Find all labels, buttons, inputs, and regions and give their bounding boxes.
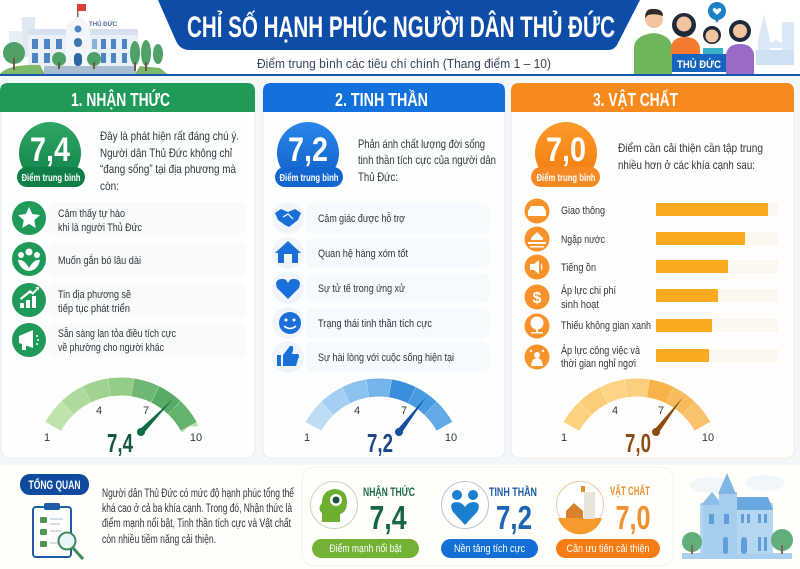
- panel: overview strip: [0, 465, 800, 569]
- row: support: [272, 202, 490, 234]
- gauge: 7,0: 7: [658, 405, 664, 417]
- subtitle: Điểm trung bình các tiêu chí chính (Thang điểm 1 – 10): [257, 56, 551, 71]
- row: traffic: Giao thông: [561, 205, 605, 217]
- overview text: điểm mạnh nổi bật, Tinh thần tích cực và Vật chất: [102, 518, 292, 530]
- title: CHỈ SỐ HẠNH PHÚC NGƯỜI DÂN THỦ ĐỨC: [187, 10, 615, 44]
- illustration: Thu Duc administrative building: [0, 4, 167, 74]
- row: lack of green space: [524, 314, 778, 338]
- row: neighbours: Quan hệ hàng xóm tốt: [318, 248, 408, 260]
- row: positive mood: [272, 307, 490, 339]
- overview tag: TỔNG QUAN: [28, 479, 80, 492]
- row: living cost: [524, 284, 778, 311]
- summary: Tinh thần: [441, 482, 538, 558]
- summary: Vật chất: VẬT CHẤT: [610, 483, 650, 498]
- gauge: 7,4: 10: [190, 432, 202, 444]
- gauge: 7,0: 7,0: [625, 428, 651, 458]
- illustration: family with Thu Duc sign: THỦ ĐỨC: [677, 58, 721, 71]
- icon: clipboard with magnifier: [33, 503, 83, 559]
- row: living cost: sinh hoạt: [561, 299, 599, 311]
- summary: Nhận thức: [310, 482, 419, 558]
- intro text: Điểm cần cải thiện cần tập trung: [618, 141, 763, 155]
- row: support: Cảm giác được hỗ trợ: [318, 212, 405, 225]
- gauge: 7,0: [561, 387, 714, 458]
- panel heading bar: 3. VẬT CHẤT: [593, 89, 678, 110]
- row: development: [12, 283, 246, 317]
- gauge: 7,4: [44, 386, 202, 458]
- gauge: 7,2: 7: [401, 405, 407, 417]
- row: traffic: [524, 198, 778, 224]
- row: neighbours: [272, 237, 490, 269]
- illustration: church: [682, 473, 793, 559]
- panel heading bar: 1. NHẬN THỨC: [71, 89, 170, 110]
- overview text: khá cao ở cả ba khía cạnh. Trong đó, Nhận thức là: [102, 503, 292, 515]
- row: proud: khi là người Thủ Đức: [58, 222, 142, 234]
- row: work pressure: thời gian nghỉ ngơi: [561, 358, 636, 370]
- row: flooding: [524, 226, 778, 252]
- row: development: tiếp tục phát triển: [58, 303, 130, 315]
- summary box outline: [302, 467, 673, 566]
- overview text: Người dân Thủ Đức có mức độ hạnh phúc tổng thể: [102, 488, 294, 500]
- row: kindness: Sự tử tế trong ứng xử: [318, 283, 406, 295]
- gauge: 7,0: 1: [561, 432, 567, 444]
- gauge: 7,4: 1: [44, 432, 50, 444]
- intro text: [618, 141, 763, 172]
- intro text: Thủ Đức:: [358, 170, 398, 184]
- title banner: [158, 0, 640, 50]
- summary: Nhận thức: Điểm mạnh nổi bật: [330, 543, 402, 555]
- overview text: còn nhiều tiềm năng cải thiện.: [102, 534, 216, 546]
- row: flooding: Ngập nước: [561, 234, 605, 246]
- score badge: 7,0: [546, 131, 586, 169]
- row: noise: [524, 254, 778, 280]
- overview text: [102, 488, 294, 546]
- gauge: 7,4: 7: [143, 405, 149, 417]
- row: spreading positivity: Sẵn sàng lan tỏa điều tích cực: [58, 327, 176, 340]
- intro text: tinh thần tích cực của người dân: [358, 153, 496, 167]
- score badge: Điểm trung bình: [280, 172, 338, 184]
- row: living cost: $: [533, 290, 542, 307]
- score badge: Điểm trung bình: [536, 172, 596, 184]
- panel heading bar: [0, 83, 255, 112]
- gauge: 7,4: 4: [96, 405, 102, 417]
- gauge: 7,4: 7,4: [107, 428, 133, 458]
- gauge: 7,2: 7,2: [367, 428, 393, 458]
- row: positive mood: Trạng thái tinh thần tích cực: [318, 318, 432, 330]
- gauge: 7,2: 4: [354, 405, 360, 417]
- panel heading bar: 2. TINH THẦN: [335, 89, 428, 110]
- gauge: 7,0: 10: [702, 432, 714, 444]
- intro text: Đây là phát hiện rất đáng chú ý.: [100, 129, 239, 143]
- summary: Vật chất: Cần ưu tiên cải thiện: [566, 543, 650, 555]
- summary: Nhận thức: 7,4: [370, 499, 407, 536]
- row: spreading positivity: về phường cho người khác: [58, 342, 164, 354]
- panel heading bar: [511, 83, 794, 112]
- gauge: 7,2: 1: [304, 432, 310, 444]
- intro text: Phản ánh chất lượng đời sống: [358, 137, 485, 151]
- score badge: [275, 122, 343, 187]
- intro text: còn:: [100, 179, 119, 193]
- score badge: Điểm trung bình: [22, 172, 80, 184]
- illustration: Thu Duc administrative building: THỦ ĐỨC: [89, 19, 117, 28]
- panel heading bar: [263, 83, 505, 112]
- summary: Tinh thần: 7,2: [496, 499, 532, 536]
- summary: Tinh thần: Nền tảng tích cực: [454, 543, 525, 555]
- gauge: 7,2: [304, 387, 457, 458]
- summary: Vật chất: 7,0: [616, 499, 650, 536]
- row: work pressure: Áp lực công việc và: [561, 344, 641, 357]
- row: work pressure: [524, 344, 778, 370]
- gauge: 7,0: 4: [612, 405, 618, 417]
- header rule: [0, 74, 800, 76]
- row: satisfaction: [272, 341, 490, 373]
- illustration: city skyline: [756, 14, 794, 65]
- row: proud: Cảm thấy tự hào: [58, 208, 125, 220]
- score badge: [531, 122, 600, 187]
- intro text: Người dân Thủ Đức không chỉ: [100, 146, 232, 160]
- intro text: “đang sống” tại địa phương mà: [100, 162, 236, 176]
- panel: 2. Tinh thần: [263, 83, 505, 458]
- row: proud: [12, 201, 246, 235]
- intro text: nhiều hơn ở các khía cạnh sau:: [618, 158, 755, 172]
- row: living cost: Áp lực chi phí: [561, 284, 616, 297]
- panel: 3. Vật chất: [511, 83, 794, 458]
- row: lack of green space: Thiếu không gian xanh: [561, 320, 651, 332]
- gauge: 7,2: 10: [445, 432, 457, 444]
- row: satisfaction: Sự hài lòng với cuộc sống hiện tại: [318, 352, 454, 364]
- illustration: family with Thu Duc sign: [634, 2, 754, 75]
- row: kindness: [272, 272, 490, 304]
- summary: Nhận thức: NHẬN THỨC: [363, 484, 415, 499]
- overview tag: [20, 474, 89, 495]
- intro text: [358, 137, 496, 184]
- intro text: [100, 129, 239, 193]
- score badge: 7,2: [288, 131, 328, 169]
- panel: 1. Nhận thức: [0, 83, 255, 458]
- summary: Vật chất: [556, 482, 660, 558]
- summary: Tinh thần: TINH THẦN: [489, 484, 537, 499]
- row: development: Tin địa phương sẽ: [58, 289, 131, 301]
- row: long attachment: Muốn gắn bó lâu dài: [58, 254, 141, 267]
- row: long attachment: [12, 242, 246, 276]
- score badge: [17, 122, 85, 187]
- row: spreading positivity: [12, 323, 246, 357]
- score badge: 7,4: [30, 131, 70, 169]
- row: noise: Tiếng ồn: [561, 262, 596, 274]
